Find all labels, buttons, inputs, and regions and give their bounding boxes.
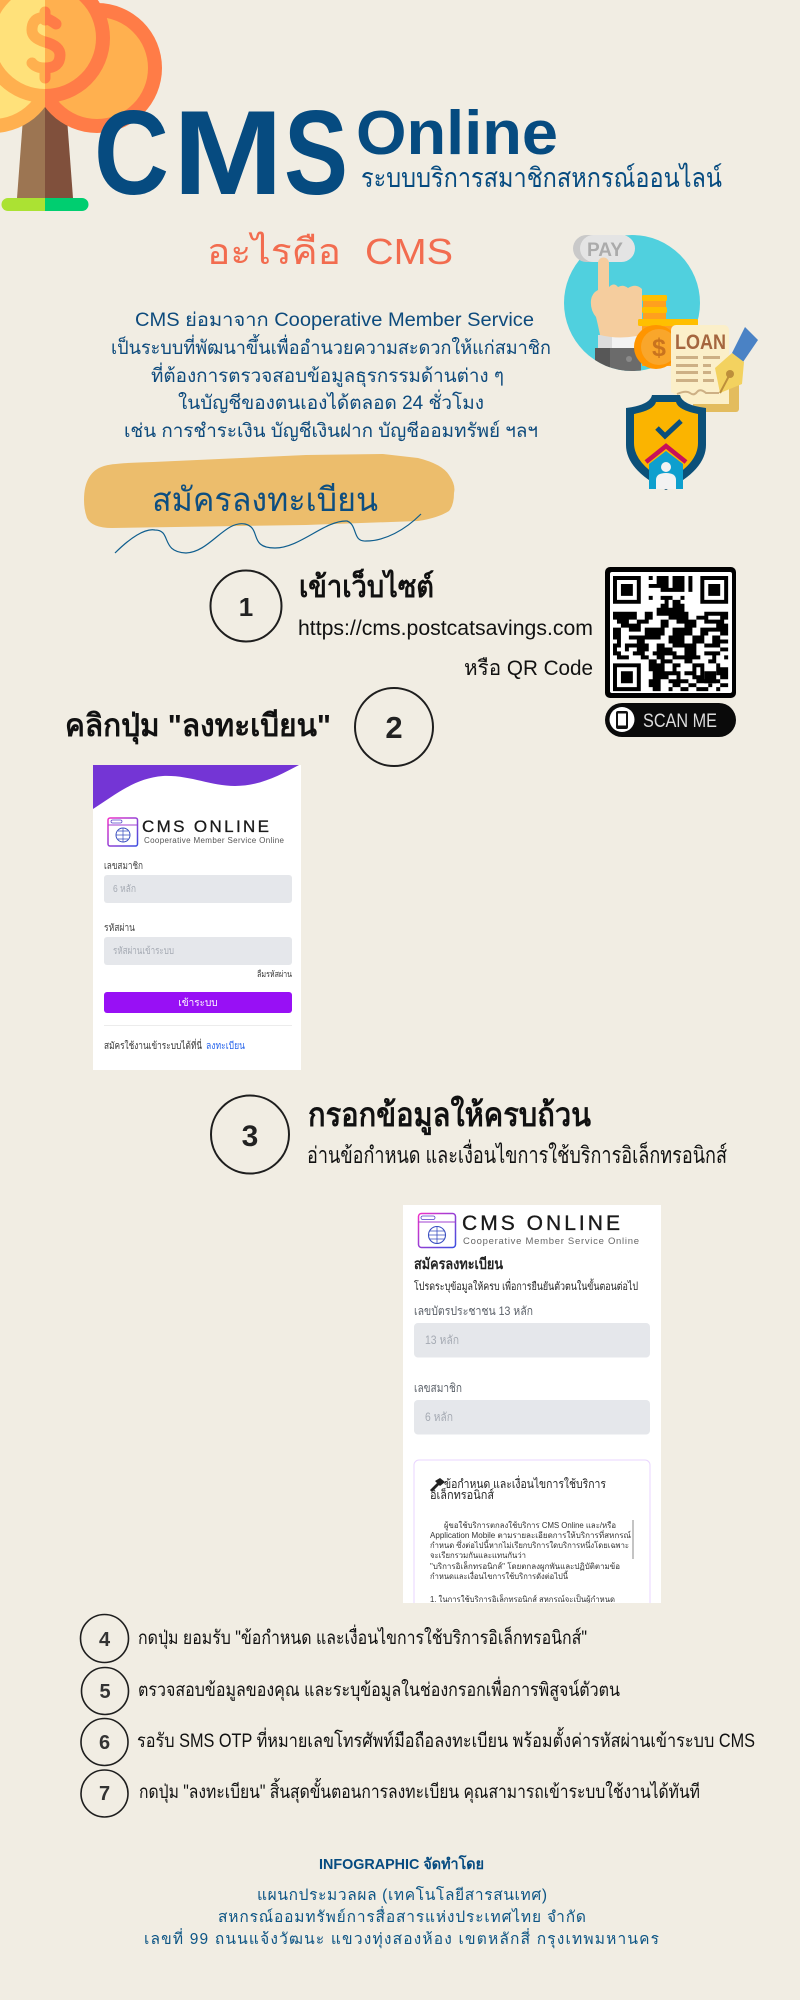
title: CMS: M bbox=[173, 86, 283, 220]
panel: login screenshot: ลงทะเบียน bbox=[206, 1040, 245, 1052]
footer address: แผนกประมวลผล (เทคโนโลยีสารสนเทศ) bbox=[257, 1886, 547, 1904]
footer address: เลขที่ 99 ถนนแจ้งวัฒนะ แขวงทุ่งสองห้อง เขตหลักสี่ กรุงเทพมหานคร bbox=[144, 1928, 659, 1949]
panel: login screenshot: Cooperative Member Service Online bbox=[144, 836, 285, 845]
title: CMS bbox=[94, 86, 348, 220]
heading: what is CMS: อะไรคือ bbox=[207, 231, 341, 272]
icon: shield with house bbox=[626, 395, 706, 490]
text block: CMS description bbox=[111, 310, 551, 442]
panel: registration screenshot: สมัครลงทะเบียน bbox=[414, 1256, 504, 1273]
panel: login screenshot: ลืมรหัสผ่าน bbox=[257, 969, 292, 979]
step 4 bbox=[80, 1614, 587, 1662]
step 1 heading: เข้าเว็บไซต์ bbox=[299, 568, 434, 604]
step 3 heading: กรอกข้อมูลให้ครบถ้วน bbox=[308, 1095, 591, 1136]
registration logo bbox=[418, 1214, 456, 1248]
panel: login screenshot: CMS ONLINE bbox=[142, 817, 269, 836]
step 7: กดปุ่ม "ลงทะเบียน" สิ้นสุดขั้นตอนการลงทะเบียน คุณสามารถเข้าระบบใช้งานได้ทันที bbox=[139, 1778, 700, 1804]
step 3 badge bbox=[211, 1096, 289, 1174]
step 2 heading: คลิกปุ่ม "ลงทะเบียน" bbox=[65, 708, 331, 745]
scan me badge: SCAN ME bbox=[643, 711, 717, 732]
step 7: 7 bbox=[99, 1783, 110, 1805]
text block: CMS description: เช่น การชำระเงิน บัญชีเงินฝาก บัญชีออมทรัพย์ ฯลฯ bbox=[124, 420, 538, 442]
icon: pay by finger with coins: $ bbox=[652, 334, 666, 362]
terms card: อิเล็กทรอนิกส์ bbox=[430, 1487, 495, 1502]
footer address bbox=[144, 1886, 659, 1949]
step 1 url: https://cms.postcatsavings.com bbox=[298, 617, 593, 640]
panel: login screenshot: เลขสมาชิก bbox=[104, 861, 143, 872]
step 5 bbox=[82, 1668, 620, 1714]
heading: what is CMS: CMS bbox=[365, 231, 453, 272]
heading: register banner bbox=[84, 454, 454, 553]
panel: registration screenshot: 13 หลัก bbox=[425, 1333, 459, 1347]
step 4: กดปุ่ม ยอมรับ "ข้อกำหนด และเงื่อนไขการใช้บริการอิเล็กทรอนิกส์" bbox=[138, 1624, 587, 1650]
step 1 badge bbox=[210, 570, 282, 642]
terms card: จะเรียกรวมกันและแทนกันว่า bbox=[430, 1551, 526, 1560]
title: Online: Online bbox=[356, 99, 558, 168]
title: CMS: S bbox=[284, 86, 348, 220]
step 2 badge: 2 bbox=[385, 710, 403, 745]
terms card: กำหนดและเงื่อนไขการใช้บริการดังต่อไปนี้ bbox=[430, 1570, 569, 1581]
text block: CMS description: CMS ย่อมาจาก Cooperative Member Service bbox=[135, 310, 534, 331]
terms card: ข้อกำหนด และเงื่อนไขการใช้บริการ bbox=[444, 1475, 606, 1491]
icon: loan document and pen: LOAN bbox=[675, 331, 726, 354]
icon: pay by finger with coins: PAY bbox=[587, 240, 623, 261]
terms card: Application Mobile ตามรายละเอียดการให้บริการที่สหกรณ์ bbox=[430, 1529, 632, 1540]
terms card bbox=[414, 1460, 650, 1603]
panel: registration screenshot: เลขบัตรประชาชน 13 หลัก bbox=[414, 1304, 533, 1318]
panel: registration screenshot bbox=[403, 1205, 661, 1630]
step 1 badge: 1 bbox=[239, 592, 253, 622]
terms card: กำหนด ซึ่งต่อไปนี้หากไม่เรียกบริการใดบริการหนึ่งโดยเฉพาะ bbox=[430, 1539, 629, 1550]
text block: CMS description: ในบัญชีของตนเองได้ตลอด 24 ชั่วโมง bbox=[178, 389, 484, 414]
icon: loan document and pen bbox=[671, 325, 758, 412]
login wave header bbox=[93, 765, 299, 809]
panel: registration screenshot: โปรดระบุข้อมูลให้ครบ เพื่อการยืนยันตัวตนในขั้นตอนต่อไป bbox=[414, 1278, 638, 1293]
text block: CMS description: ที่ต้องการตรวจสอบข้อมูลธุรกรรมด้านต่าง ๆ bbox=[151, 362, 504, 388]
step 7 bbox=[81, 1770, 700, 1817]
panel: registration screenshot: CMS ONLINE bbox=[462, 1212, 620, 1235]
title: CMS: C bbox=[94, 86, 169, 220]
footer address: สหกรณ์ออมทรัพย์การสื่อสารแห่งประเทศไทย จำกัด bbox=[218, 1906, 586, 1926]
panel: registration screenshot: 6 หลัก bbox=[425, 1410, 453, 1424]
icon: pay by finger with coins bbox=[564, 235, 700, 373]
terms card: 1. ในการใช้บริการอิเล็กทรอนิกส์ สหกรณ์จะเป็นผู้กำหนด bbox=[430, 1594, 615, 1605]
step 4: 4 bbox=[99, 1629, 111, 1651]
panel: login screenshot: 6 หลัก bbox=[113, 884, 136, 895]
step 6 bbox=[81, 1718, 755, 1766]
panel: login screenshot bbox=[93, 765, 301, 1070]
step 3 badge: 3 bbox=[242, 1120, 258, 1153]
step 5: 5 bbox=[99, 1681, 111, 1703]
step 6: 6 bbox=[99, 1732, 110, 1754]
step 1 QR hint: หรือ QR Code bbox=[464, 657, 593, 680]
panel: registration screenshot: เลขสมาชิก bbox=[414, 1381, 462, 1395]
panel: login screenshot: รหัสผ่านเข้าระบบ bbox=[113, 945, 174, 957]
QR code bbox=[605, 567, 736, 698]
heading: what is CMS bbox=[207, 231, 453, 272]
scan me badge bbox=[605, 703, 736, 737]
icon: gavel bbox=[430, 1478, 445, 1492]
terms card: "บริการอิเล็กทรอนิกส์" โดยตกลงผูกพันและปฏิบัติตามข้อ bbox=[430, 1561, 620, 1572]
step 5: ตรวจสอบข้อมูลของคุณ และระบุข้อมูลในช่องกรอกเพื่อการพิสูจน์ตัวตน bbox=[138, 1676, 620, 1702]
login logo bbox=[108, 818, 138, 846]
panel: login screenshot: เข้าระบบ bbox=[178, 997, 218, 1009]
subtitle: ระบบบริการสมาชิกสหกรณ์ออนไลน์ bbox=[361, 162, 722, 193]
footer heading: INFOGRAPHIC จัดทำโดย bbox=[319, 1854, 484, 1873]
icon: money tree bbox=[0, 0, 162, 211]
text block: CMS description: เป็นระบบที่พัฒนาขึ้นเพื่ออำนวยความสะดวกให้แก่สมาชิก bbox=[111, 334, 551, 359]
terms card: ผู้ขอใช้บริการตกลงใช้บริการ CMS Online และ/หรือ bbox=[444, 1521, 616, 1531]
step 2 badge bbox=[355, 688, 433, 766]
panel: login screenshot: สมัครใช้งานเข้าระบบได้ที่นี่ bbox=[104, 1038, 202, 1052]
panel: login screenshot: รหัสผ่าน bbox=[104, 923, 135, 934]
heading: register banner: สมัครลงทะเบียน bbox=[152, 481, 378, 518]
panel: registration screenshot: Cooperative Member Service Online bbox=[463, 1236, 639, 1247]
